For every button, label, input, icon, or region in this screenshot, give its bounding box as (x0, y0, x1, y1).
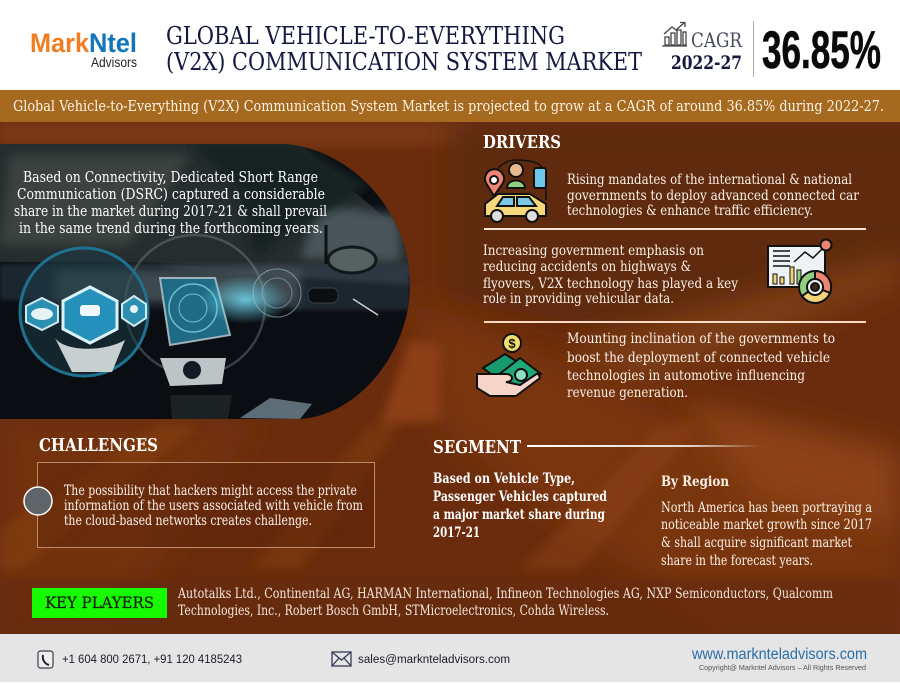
heading: challenges: CHALLENGES (39, 436, 158, 456)
segment: by region (661, 474, 872, 569)
phone numbers: +1 604 800 2671, +91 120 4185243 (62, 654, 242, 666)
panel: challenges: The possibility that hackers might access the private (64, 483, 357, 499)
segment: vehicle type (433, 471, 607, 541)
key players label: KEY PLAYERS (45, 594, 154, 612)
steering wheel (20, 248, 148, 376)
header: company logo: Mark (30, 28, 90, 58)
header: company logo: Advisors (91, 54, 137, 70)
segment: vehicle type: Based on Vehicle Type, (433, 471, 575, 487)
title (166, 21, 643, 76)
segment: by region: By Region (661, 474, 729, 490)
website: www.marknteladvisors.com (691, 646, 867, 663)
divider (753, 21, 754, 77)
icon: money in hand (477, 334, 541, 396)
icon: analytics dashboard (768, 240, 832, 303)
icon: envelope (332, 652, 351, 666)
driver text 1 (567, 172, 859, 219)
segment: vehicle type: 2017-21 (433, 525, 480, 541)
email: sales@marknteladvisors.com (358, 654, 510, 666)
segment: vehicle type: a major market share during (433, 507, 605, 523)
panel: challenges: information of the users associated with vehicle from (64, 498, 363, 514)
icon: connected car (485, 160, 546, 222)
driver text 3 (567, 331, 835, 401)
driver text 2: Increasing government emphasis on (483, 243, 704, 259)
footer bar (0, 634, 900, 682)
driver text 1: governments to deploy advanced connected car (567, 188, 859, 204)
driver text 1: Rising mandates of the international & national (567, 172, 852, 188)
panel: challenges: the cloud-based networks creates challenge. (64, 513, 312, 529)
photo caption: share in the market during 2017-21 & shall prevail (14, 204, 327, 220)
key players list (177, 586, 833, 619)
driver text 2 (483, 243, 738, 307)
key players list: Technologies, Inc., Robert Bosch GmbH, STMicroelectronics, Cohda Wireless. (178, 603, 609, 619)
hologram (204, 278, 288, 323)
dashboard screen (160, 278, 230, 345)
CAGR label: 2022-27 (671, 53, 742, 74)
vents (308, 288, 338, 303)
photo caption: Communication (DSRC) captured a considerable (17, 187, 325, 203)
copyright: Copyright@ Markntel Advisors – All Rights Reserved (699, 665, 866, 672)
CAGR label (671, 29, 743, 74)
segment: by region: share in the forecast years. (661, 553, 813, 569)
heading: drivers: DRIVERS (483, 133, 561, 153)
title: GLOBAL VEHICLE-TO-EVERYTHING (166, 21, 565, 50)
panel: challenges (24, 462, 374, 548)
photo caption: Based on Connectivity, Dedicated Short Range (23, 170, 318, 186)
driver text 1: technologies & enhance traffic efficiency. (567, 203, 813, 219)
icon: money in hand: $ (508, 336, 516, 351)
photo caption: in the same trend during the forthcoming years. (19, 221, 323, 237)
centre console (160, 358, 226, 386)
driver text 2: flyovers, V2X technology has played a key (483, 276, 738, 292)
background: road texture (0, 120, 900, 640)
heading: segment: SEGMENT (433, 438, 521, 458)
driver text 2: role in providing vehicular data. (483, 291, 674, 307)
header: company logo: Ntel (89, 28, 137, 58)
summary banner (0, 90, 900, 122)
panel: cockpit photo (0, 144, 420, 420)
icon: phone (38, 651, 53, 668)
photo caption (14, 170, 327, 237)
title: (V2X) COMMUNICATION SYSTEM MARKET (166, 47, 643, 76)
segment: vehicle type: Passenger Vehicles captured (433, 489, 607, 505)
driver text 3: revenue generation. (567, 385, 688, 401)
driver text 3: Mounting inclination of the governments to (567, 331, 835, 347)
CAGR label: CAGR (691, 29, 743, 52)
driver text 3: technologies in automotive influencing (567, 368, 805, 384)
key players label (32, 588, 167, 618)
driver text 3: boost the deployment of connected vehicle (567, 350, 830, 366)
icon: growth chart (662, 22, 687, 46)
header: company logo (30, 28, 137, 70)
side mirror (328, 247, 376, 273)
segment: by region: & shall acquire significant market (661, 535, 852, 551)
hexagon icons (63, 287, 117, 343)
driver text 2: reducing accidents on highways & (483, 259, 691, 275)
